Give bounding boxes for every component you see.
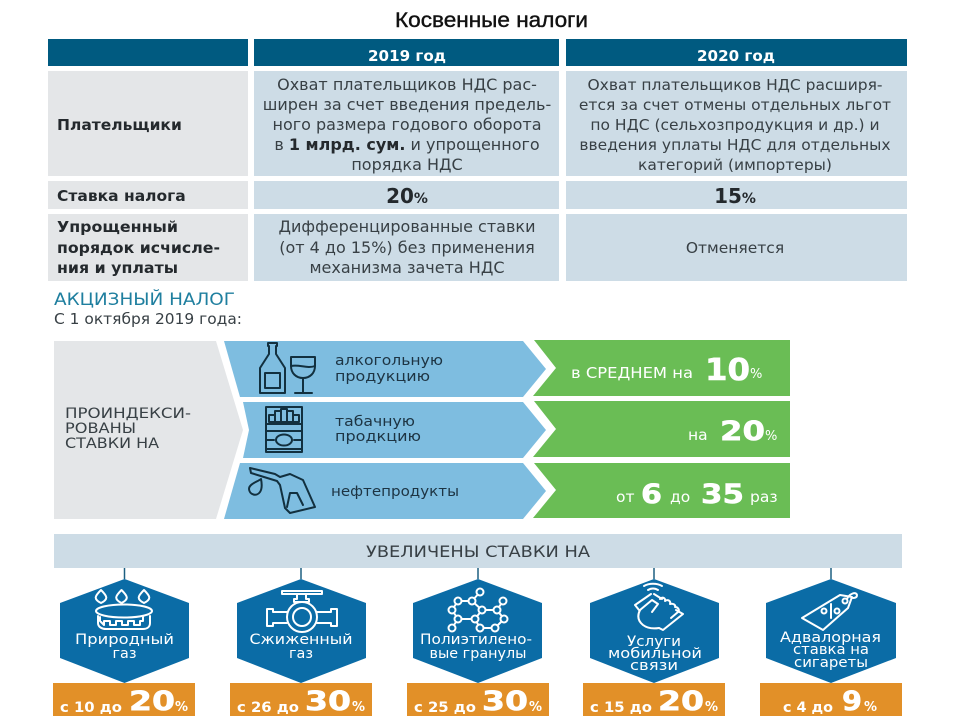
item: natural gas: газ <box>112 646 136 662</box>
row: payers: Охват плательщиков НДС рас- <box>277 75 537 94</box>
item: ad valorem cigarette rate: сигареты <box>794 655 868 671</box>
item: natural gas <box>60 568 189 683</box>
value: liquefied gas <box>230 683 372 717</box>
blue arrow: alcohol: алкогольную <box>335 353 443 369</box>
item: polyethylene granules <box>413 568 542 683</box>
item: liquefied gas: Сжиженный <box>250 632 352 648</box>
value: mobile services: 20 <box>658 686 704 717</box>
green bar: 6 to 35 times: от <box>616 488 635 506</box>
row: simplified procedure: ния и уплаты <box>57 259 178 277</box>
value: natural gas <box>53 683 195 717</box>
icon: price tag <box>802 593 857 630</box>
value: ad valorem cigarette rate: % <box>864 700 877 715</box>
excise heading: С 1 октября 2019 года: <box>54 310 242 328</box>
item: mobile services: Услуги <box>627 634 681 650</box>
item: liquefied gas <box>237 568 366 683</box>
excise heading: АКЦИЗНЫЙ НАЛОГ <box>54 290 235 309</box>
green bar: 6 to 35 times <box>533 463 790 518</box>
excise heading <box>54 290 242 328</box>
icon: fuel nozzle <box>249 468 315 513</box>
row: payers: ширен за счет введения предель- <box>263 95 551 114</box>
row: simplified procedure: механизма зачета НДС <box>309 258 505 277</box>
grey arrow: indexed rates: РОВАНЫ <box>65 421 136 437</box>
table header row: 2020 год <box>697 47 775 65</box>
blue arrow: alcohol <box>224 341 546 397</box>
green bar: 6 to 35 times: 6 <box>641 479 662 510</box>
green bar: 20%: % <box>765 429 777 444</box>
green bar: 20%: на <box>688 426 708 444</box>
green bar: 10%: в СРЕДНЕМ на <box>571 364 693 382</box>
icon: hand with phone <box>635 584 683 630</box>
item: mobile services: связи <box>630 658 678 674</box>
grey arrow: indexed rates <box>54 341 243 519</box>
row: simplified procedure: Дифференцированные ставки <box>279 217 535 236</box>
item: ad valorem cigarette rate: ставка на <box>793 642 869 658</box>
item: mobile services <box>590 568 719 683</box>
blue arrow: tobacco <box>243 402 546 458</box>
row: simplified procedure: (от 4 до 15%) без применения <box>279 238 535 257</box>
green bar: 10%: % <box>750 367 762 382</box>
item: ad valorem cigarette rate <box>766 568 896 683</box>
blue arrow: oil products <box>224 463 546 519</box>
row: payers: ется за счет отмены отдельных льгот <box>579 96 891 114</box>
table header row <box>48 39 907 66</box>
row: simplified procedure <box>48 214 907 281</box>
row: payers: введения уплаты НДС для отдельных <box>579 136 891 154</box>
item: natural gas: Природный <box>75 632 174 648</box>
band: increased rates: УВЕЛИЧЕНЫ СТАВКИ НА <box>366 542 590 561</box>
row: payers: в 1 млрд. сум. и упрощенного <box>274 135 540 154</box>
icon: valve <box>267 591 337 632</box>
row: payers: порядка НДС <box>351 155 463 174</box>
value: ad valorem cigarette rate: 9 <box>842 686 862 717</box>
row: tax rate: 20% <box>386 184 428 208</box>
row: payers <box>48 71 907 176</box>
value: polyethylene granules <box>407 683 549 717</box>
value: polyethylene granules: % <box>529 700 542 715</box>
title: Косвенные налоги <box>395 9 588 32</box>
band: increased rates <box>54 534 902 568</box>
item: polyethylene granules: Полиэтилено- <box>420 632 532 648</box>
item: ad valorem cigarette rate: Адвалорная <box>780 630 881 646</box>
item: polyethylene granules: вые гранулы <box>430 646 526 662</box>
value: mobile services <box>583 683 725 717</box>
value: natural gas: с 10 до <box>60 700 122 716</box>
green bar: 6 to 35 times: 35 <box>701 479 744 510</box>
value: mobile services: с 15 до <box>590 700 652 716</box>
excise diagram <box>54 340 790 519</box>
row: tax rate <box>48 181 907 209</box>
blue arrow: alcohol: продукцию <box>335 369 430 385</box>
row: simplified procedure: Упрощенный <box>57 218 178 236</box>
green bar: 6 to 35 times: раз <box>750 488 778 506</box>
row: payers: ного размера годового оборота <box>272 115 542 134</box>
value: polyethylene granules: с 25 до <box>414 700 476 716</box>
value: liquefied gas: 30 <box>305 686 351 717</box>
tax table <box>48 39 907 281</box>
grey arrow: indexed rates: СТАВКИ НА <box>65 436 159 452</box>
row: simplified procedure: Отменяется <box>686 239 784 257</box>
icon: molecule <box>448 588 508 632</box>
row: payers: категорий (импортеры) <box>638 156 832 174</box>
row: payers: по НДС (сельхозпродукция и др.) и <box>590 116 880 134</box>
blue arrow: tobacco: табачную <box>335 414 415 430</box>
green bar: 20%: 20 <box>720 416 765 447</box>
icon: cigarette pack <box>266 407 302 452</box>
value: polyethylene granules: 30 <box>482 686 528 717</box>
item: liquefied gas: газ <box>289 646 313 662</box>
blue arrow: oil products: нефтепродукты <box>331 484 459 500</box>
value: ad valorem cigarette rate <box>760 683 902 717</box>
green bar: 20% <box>533 401 790 457</box>
green bar: 10%: 10 <box>705 353 750 388</box>
value: ad valorem cigarette rate: с 4 до <box>783 700 833 716</box>
value: natural gas: 20 <box>129 686 175 717</box>
value: liquefied gas: с 26 до <box>237 700 299 716</box>
table header row: 2019 год <box>368 47 446 65</box>
row: tax rate: 15% <box>714 184 756 208</box>
green bar: 6 to 35 times: до <box>670 488 690 506</box>
row: simplified procedure: порядок исчисле- <box>57 239 220 257</box>
value: natural gas: % <box>175 700 188 715</box>
row: payers: Охват плательщиков НДС расширя- <box>587 76 883 94</box>
value: liquefied gas: % <box>352 700 365 715</box>
blue arrow: tobacco: продкцию <box>335 429 421 445</box>
value: mobile services: % <box>705 700 718 715</box>
green bar: 10% <box>533 340 790 396</box>
grey arrow: indexed rates: ПРОИНДЕКСИ- <box>65 406 191 422</box>
icon: gas burner <box>96 590 152 629</box>
row: payers: Плательщики <box>57 116 182 134</box>
item: mobile services: мобильной <box>608 646 702 662</box>
row: tax rate: Ставка налога <box>57 187 186 205</box>
icon: bottle and glass <box>260 343 315 393</box>
